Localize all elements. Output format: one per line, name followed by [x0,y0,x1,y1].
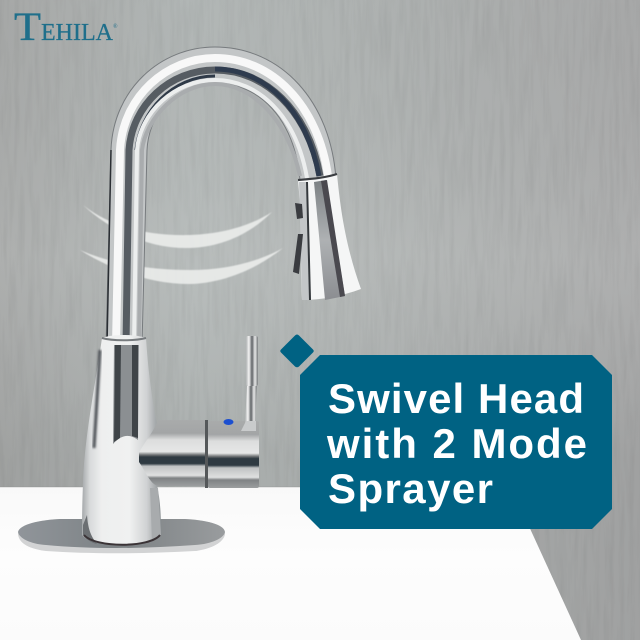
handle cylinders [139,420,259,488]
lever handle [241,336,258,431]
brand logo: Tehila [14,4,118,49]
swoosh motion lines behind neck [80,205,283,284]
brand logo: Tehila: ® [113,23,118,30]
sprayer buttons [293,203,303,274]
callout panel [300,355,612,529]
faucet spout tube [107,58,328,345]
brand logo: Tehila: EHILA [41,20,114,46]
deck plate [18,519,225,553]
decorative diamond accent [280,334,314,367]
white sink counter [0,487,581,640]
spray head [298,174,361,300]
blue indicator dot [224,419,234,425]
callout text [326,375,587,512]
faucet [18,58,361,553]
callout text: Sprayer [328,465,493,512]
faucet base [82,335,161,545]
brand logo: Tehila: T [14,4,41,49]
callout text: with 2 Mode [326,420,587,467]
callout text: Swivel Head [328,375,584,422]
